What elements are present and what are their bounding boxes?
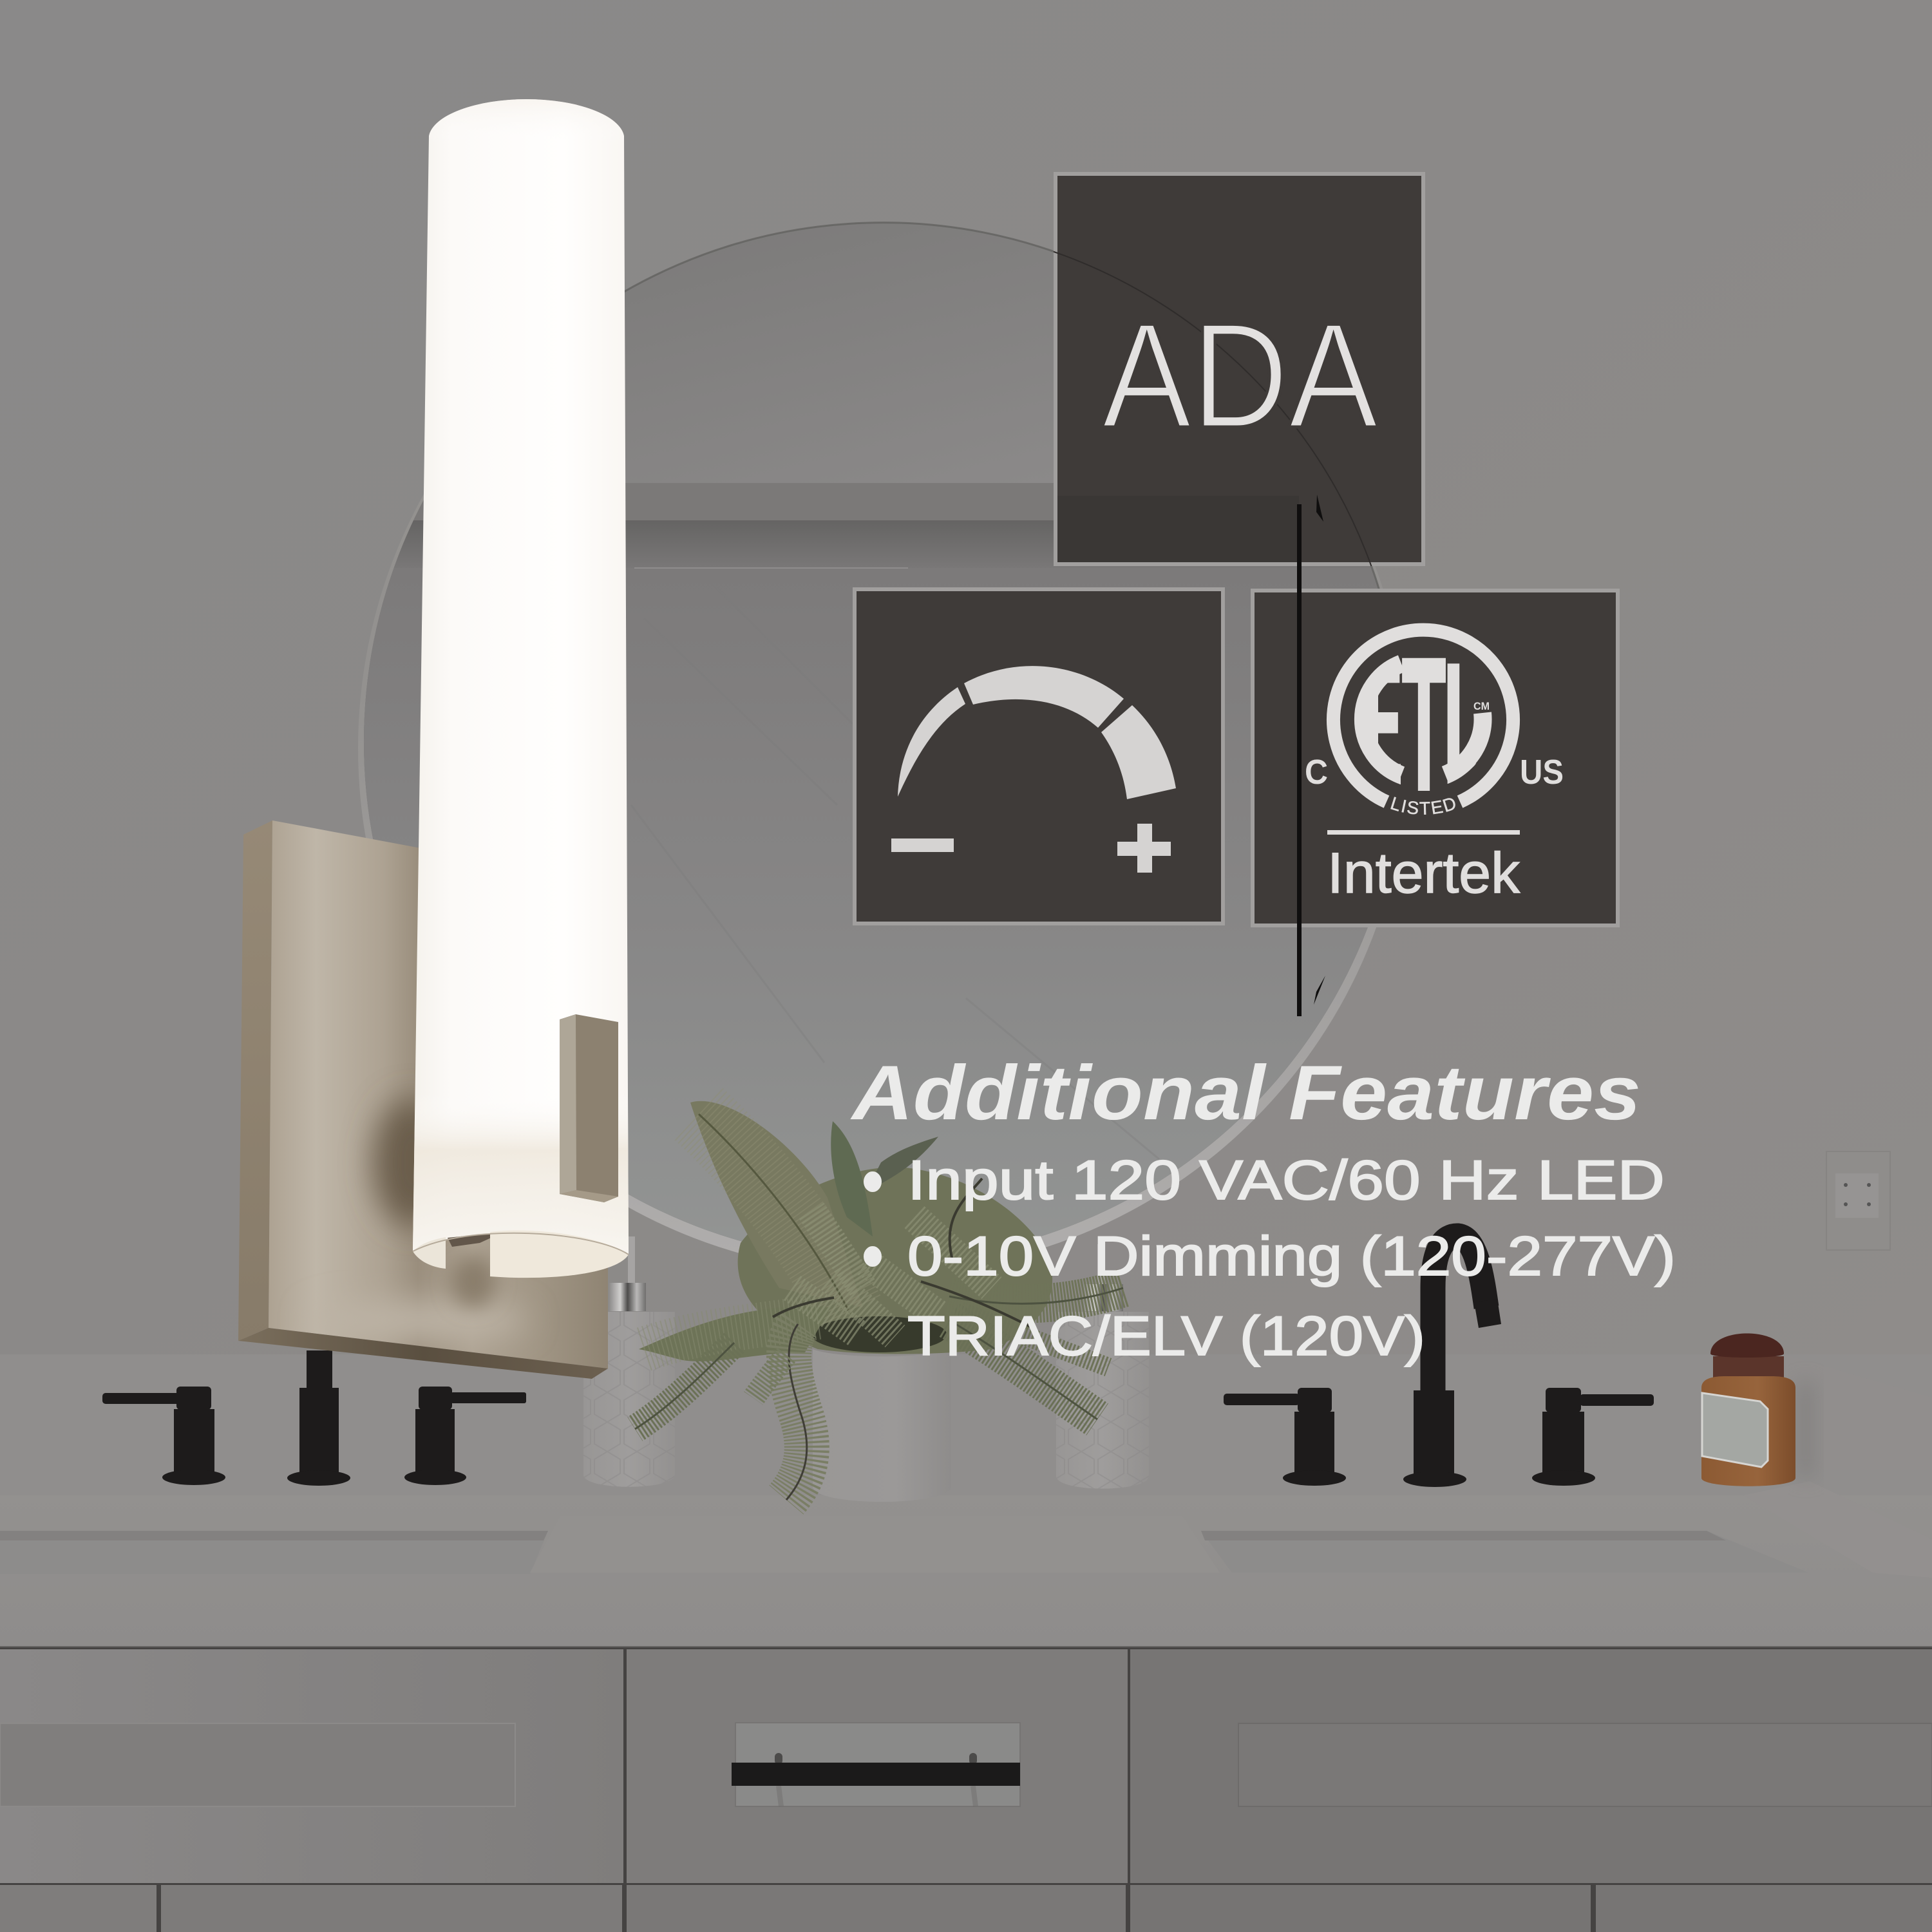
frond dark stems xyxy=(773,1179,1030,1327)
left sink xyxy=(0,1531,548,1574)
ETL listed mark: LISTED xyxy=(1390,797,1455,815)
round mirror xyxy=(358,219,1410,1273)
feature list xyxy=(864,1150,1676,1367)
frond top xyxy=(831,1121,873,1236)
drawer pull xyxy=(732,1753,1020,1806)
countertop xyxy=(0,1470,1932,1649)
wall sconce lamp xyxy=(238,99,629,1379)
amber bottle xyxy=(1701,1333,1815,1486)
backsplash xyxy=(0,1354,1932,1539)
heading: Additional Features: Additional Features xyxy=(850,1050,1641,1136)
vanity cabinets xyxy=(0,1647,1932,1932)
icon: plus xyxy=(1117,824,1171,873)
centre spout base xyxy=(287,1350,350,1486)
ETL listed mark: E xyxy=(1367,625,1403,822)
ETL listed mark xyxy=(1305,620,1564,829)
centre drawer xyxy=(627,1649,1128,1883)
frond far lower right xyxy=(966,1314,1108,1367)
frond right xyxy=(949,1288,1123,1303)
plate shadow xyxy=(374,1098,451,1227)
plate shadow under tube xyxy=(451,1256,496,1307)
right faucet set xyxy=(1224,1236,1654,1487)
bracket shadow in opening xyxy=(448,1232,504,1247)
soap dispenser right xyxy=(1056,1244,1149,1489)
fern plant xyxy=(635,1101,1123,1500)
frond small hanging xyxy=(753,1355,786,1398)
badge: dimming xyxy=(855,589,1223,923)
ADA text: ADA xyxy=(1102,292,1378,459)
frond lower right xyxy=(949,1320,1097,1419)
icon: minus xyxy=(891,838,954,852)
ETL listed mark: US xyxy=(1520,753,1564,791)
icon: dimmer gauge xyxy=(898,666,1176,799)
lower drawers xyxy=(0,1885,1932,1932)
ETL listed mark: L xyxy=(1443,628,1488,822)
right handle xyxy=(404,1387,526,1485)
frond centre highlights xyxy=(792,1211,992,1336)
ETL listed mark: C xyxy=(1305,753,1328,791)
ETL listed mark: CM xyxy=(1473,700,1490,712)
lit lamp opening right xyxy=(490,1231,629,1278)
left door xyxy=(0,1649,623,1883)
left handle xyxy=(102,1387,225,1485)
frond far left xyxy=(639,1307,831,1361)
Intertek wordmark: Intertek xyxy=(1327,840,1520,905)
backplate xyxy=(238,820,608,1379)
item: input: Input 120 VAC/60 Hz LED xyxy=(907,1150,1665,1211)
right sink xyxy=(1201,1531,1808,1573)
mirror bracket shadow line xyxy=(1297,495,1325,1016)
left handle xyxy=(1224,1388,1346,1486)
item: triac: TRIAC/ELV (120V) xyxy=(907,1305,1425,1367)
frond hanging xyxy=(786,1324,807,1500)
electrical outlet xyxy=(1826,1151,1890,1250)
bullet 2 xyxy=(864,1247,881,1266)
right handle xyxy=(1532,1388,1654,1486)
item: dimming: 0-10V Dimming (120-277V) xyxy=(907,1226,1676,1287)
badge: ADA xyxy=(1054,172,1425,566)
soap dispenser left xyxy=(583,1236,675,1487)
frond lower left xyxy=(635,1343,734,1429)
tube clamp block xyxy=(560,1014,618,1202)
ETL listed mark: T xyxy=(1402,620,1446,829)
gooseneck spout xyxy=(1403,1236,1501,1487)
wall background xyxy=(0,0,1932,1359)
badge: ETL Intertek xyxy=(1251,589,1620,927)
bullet 1 xyxy=(864,1172,881,1191)
left faucet set xyxy=(102,1350,526,1486)
foliage mass xyxy=(738,1167,1052,1354)
frond upper left xyxy=(690,1101,863,1314)
lit lamp opening left xyxy=(413,1237,446,1269)
glass tube xyxy=(413,99,629,1278)
planter pot xyxy=(813,1349,951,1502)
frond top right xyxy=(866,1137,938,1191)
right door xyxy=(1130,1649,1932,1883)
plate highlight band xyxy=(309,1301,528,1340)
bottle label xyxy=(1702,1393,1768,1467)
